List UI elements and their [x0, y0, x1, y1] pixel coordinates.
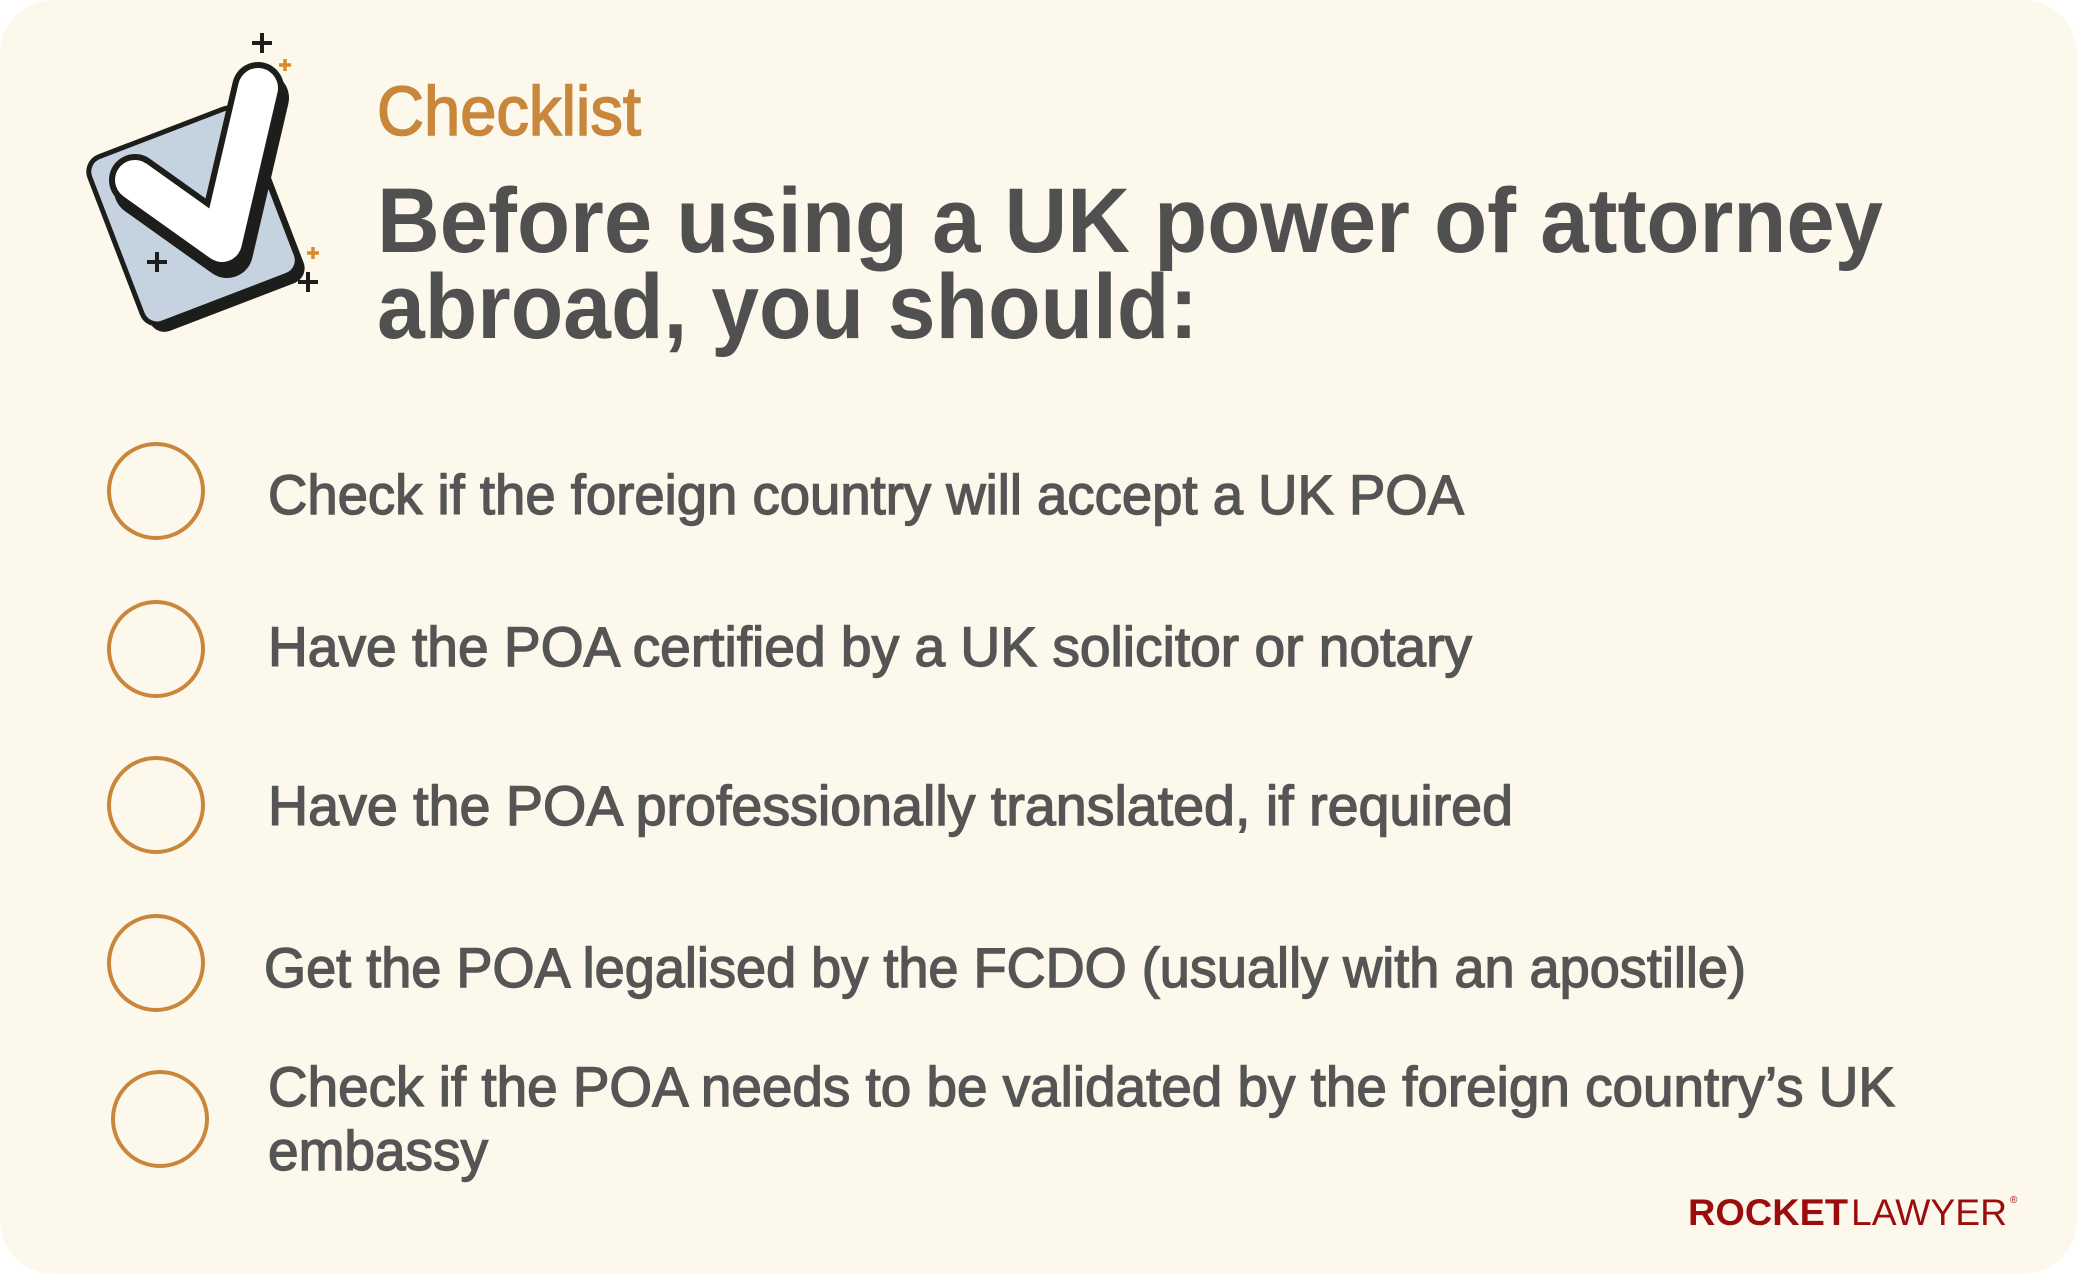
item texts: Check if the POA needs to be validated by the foreign country’s UK: [268, 1055, 1895, 1118]
circle 4: [109, 916, 203, 1010]
logo: Rocket Lawyer: ®: [2010, 1195, 2018, 1206]
checklist items: [109, 444, 207, 1166]
logo: Rocket Lawyer: [1688, 1192, 2018, 1233]
circle 2: [109, 602, 203, 696]
title: Before using a UK power of attorney: [377, 170, 1883, 272]
circle 1: [109, 444, 203, 538]
title: abroad, you should:: [377, 256, 1198, 358]
heading: Checklist: Checklist: [377, 72, 641, 150]
title: [377, 170, 1883, 358]
item texts: Check if the foreign country will accept a UK POA: [268, 463, 1465, 526]
item texts: Have the POA certified by a UK solicitor or notary: [268, 615, 1472, 678]
circle 5: [113, 1072, 207, 1166]
item texts: [264, 463, 1895, 1182]
circle 3: [109, 758, 203, 852]
item texts: Have the POA professionally translated, if required: [268, 774, 1513, 837]
item texts: Get the POA legalised by the FCDO (usually with an apostille): [264, 936, 1746, 999]
icon: checkbox with checkmark: [84, 33, 319, 338]
logo: Rocket Lawyer: ROCKET: [1688, 1192, 1848, 1233]
logo: Rocket Lawyer: LAWYER: [1851, 1192, 2007, 1233]
item texts: embassy: [268, 1119, 488, 1182]
